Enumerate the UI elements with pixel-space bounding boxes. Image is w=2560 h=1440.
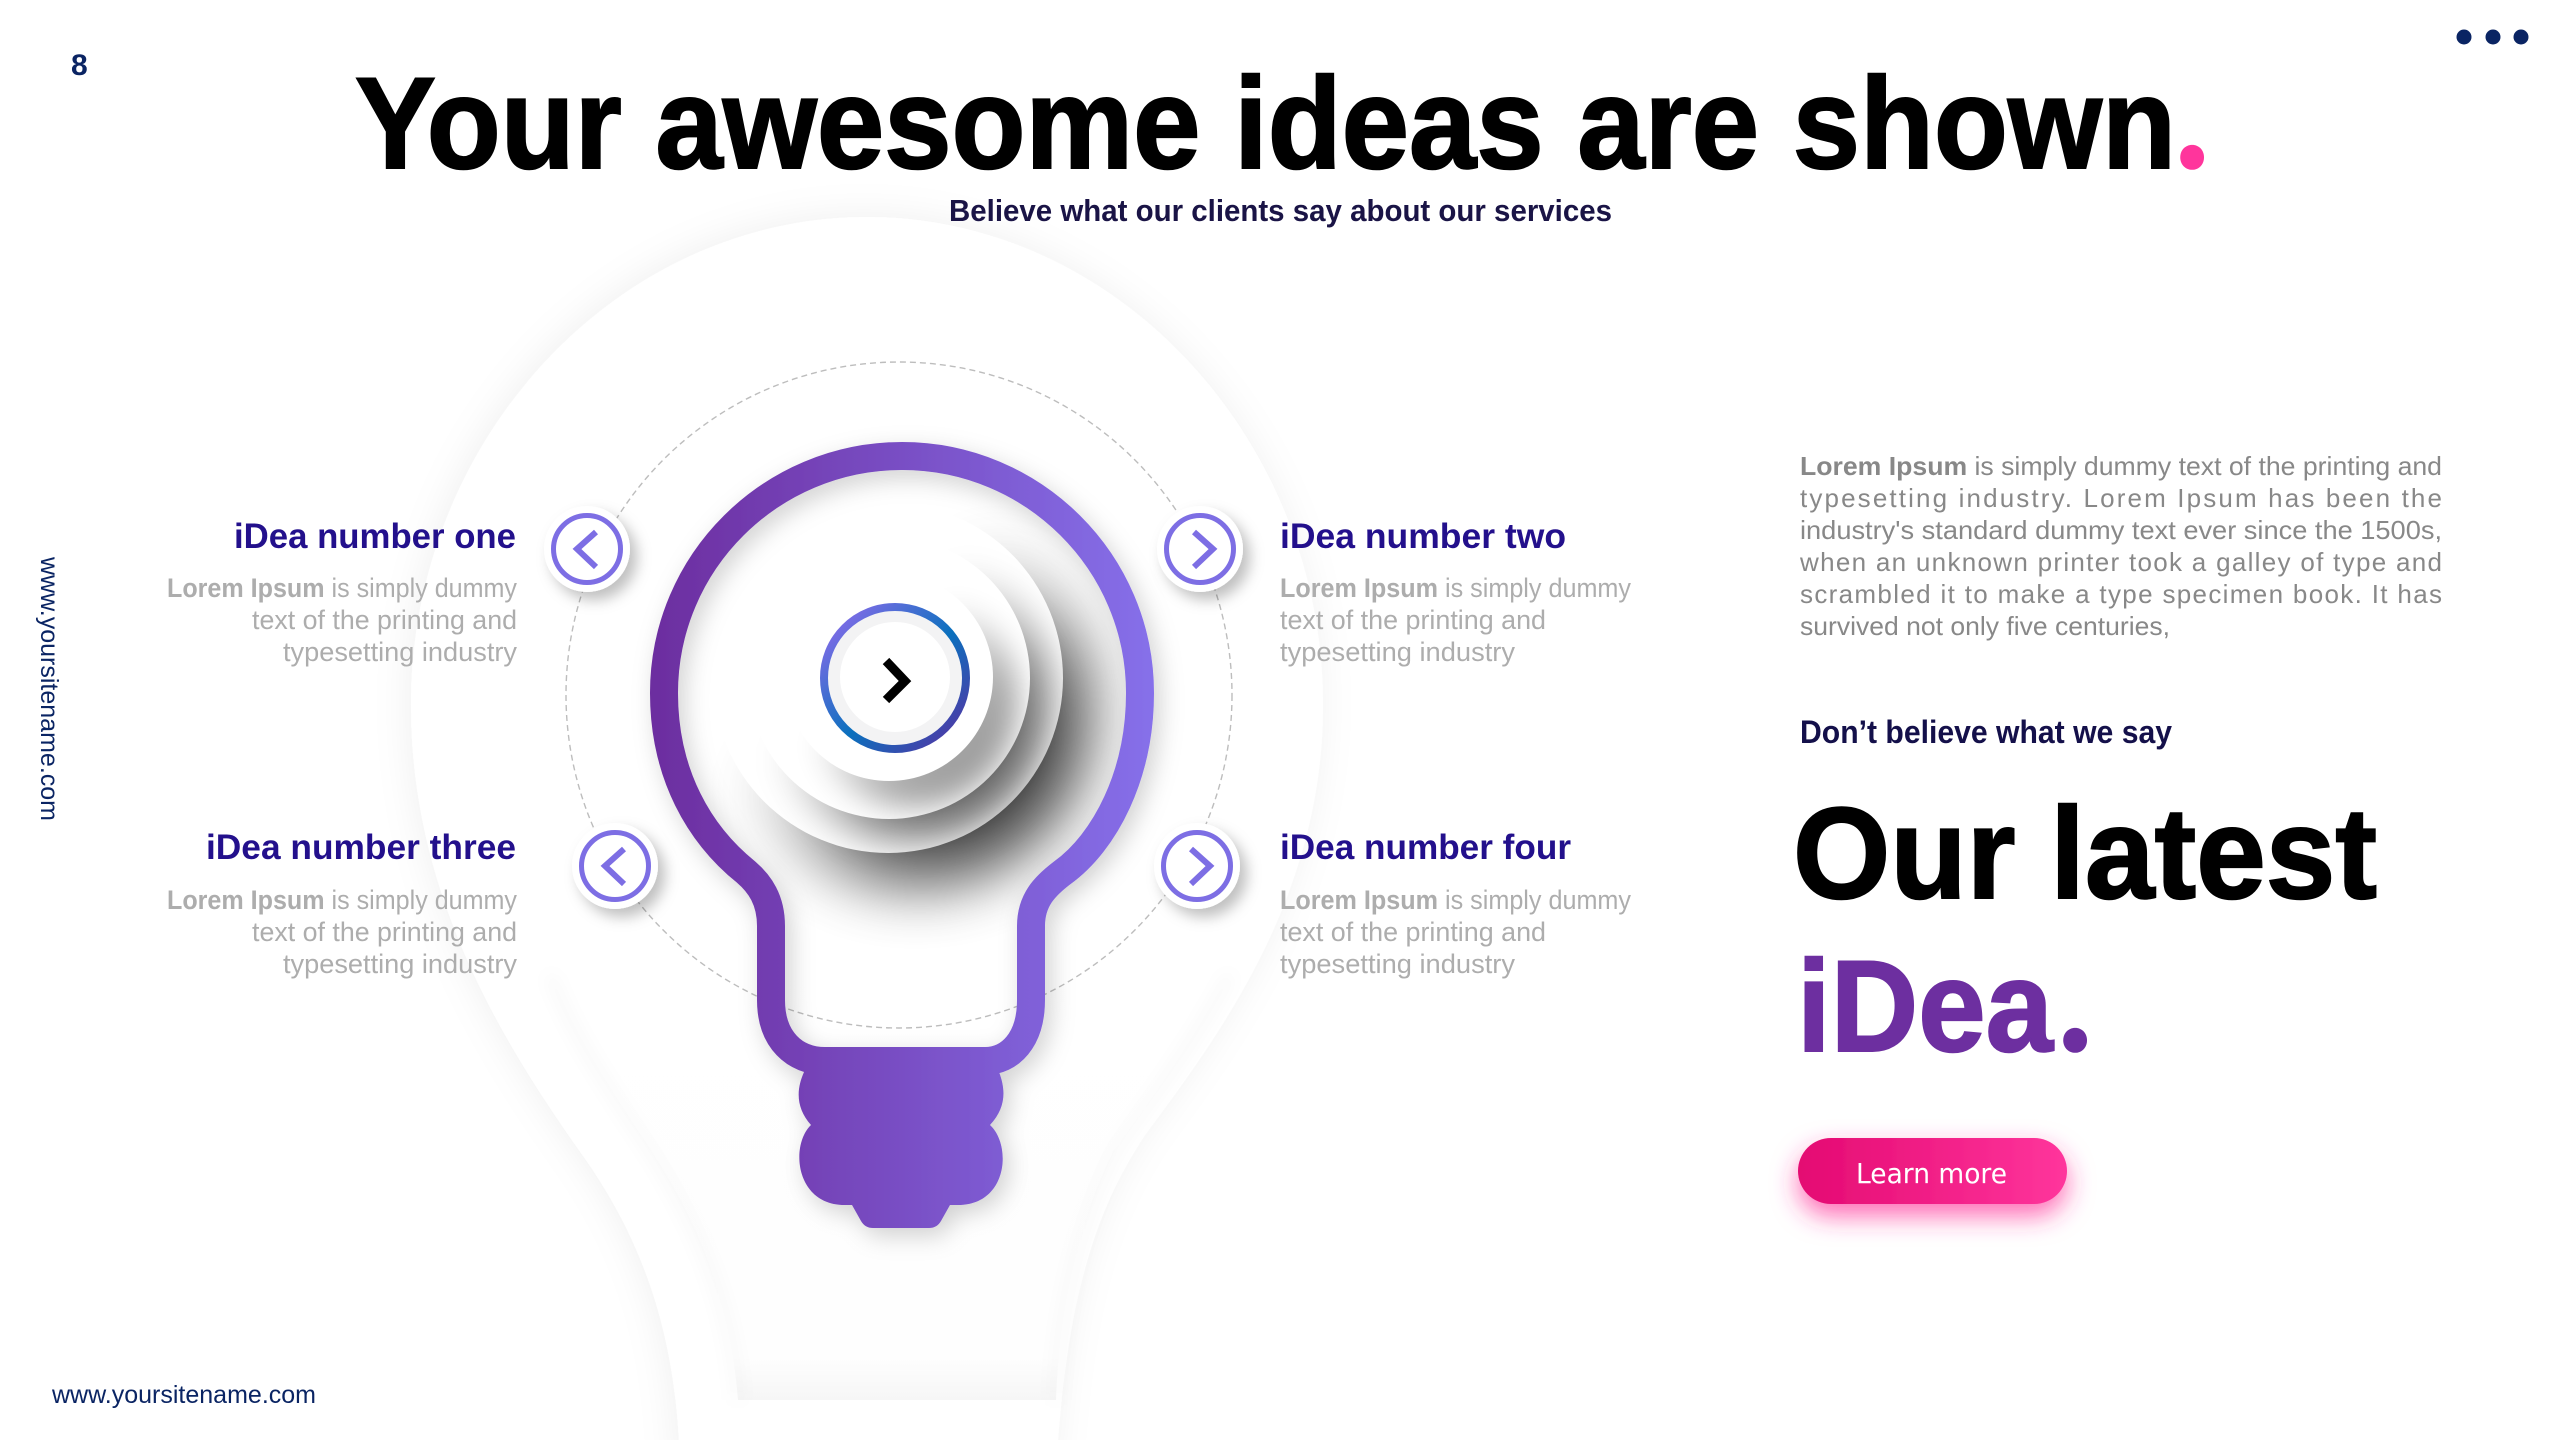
page number: 8 <box>71 49 88 82</box>
title: . <box>2171 18 2213 206</box>
idea three text <box>167 828 518 979</box>
dashed orbit circle <box>566 362 1232 1028</box>
idea three text: Lorem Ipsum is simply dummy <box>167 885 517 915</box>
headline: idea: iDea <box>1797 933 2055 1079</box>
centre button <box>824 607 966 749</box>
idea two text <box>1280 517 1631 667</box>
right paragraph: survived not only five centuries, <box>1800 611 2170 641</box>
headline: our latest: Our latest <box>1793 780 2377 926</box>
idea one text: typesetting industry <box>283 637 518 667</box>
idea four text <box>1280 828 1631 979</box>
right paragraph: Lorem Ipsum is simply dummy text of the printing and <box>1800 451 2442 481</box>
idea two text: Lorem Ipsum is simply dummy <box>1280 573 1631 603</box>
icon: idea two arrow <box>1157 506 1243 592</box>
subheading: Don’t believe what we say <box>1800 714 2172 750</box>
idea two text: typesetting industry <box>1280 637 1516 667</box>
learn more button: Learn more <box>1856 1157 2007 1190</box>
subtitle: Believe what our clients say about our services <box>949 193 1612 228</box>
title: Your awesome ideas are shown <box>355 50 2176 196</box>
background bulb silhouette <box>411 217 1323 1440</box>
idea three text: iDea number three <box>206 828 516 867</box>
idea one text: text of the printing and <box>252 605 517 635</box>
footer site name: www.yoursitename.com <box>51 1381 316 1409</box>
idea one text <box>167 517 518 667</box>
icon: centre chevron <box>886 661 905 700</box>
idea four text: typesetting industry <box>1280 949 1516 979</box>
right paragraph: scrambled it to make a type specimen book. It has <box>1800 579 2442 609</box>
idea four text: text of the printing and <box>1280 917 1546 947</box>
menu dots <box>2456 30 2528 44</box>
idea two text: text of the printing and <box>1280 605 1546 635</box>
bulb outline and base <box>664 456 1140 1228</box>
vertical site name: www.yoursitename.com <box>35 556 63 821</box>
idea one text: iDea number one <box>234 517 516 556</box>
icon: idea four arrow <box>1154 823 1240 909</box>
concentric shadow discs <box>713 503 1096 890</box>
learn more button <box>1798 1138 2067 1204</box>
right paragraph: industry's standard dummy text ever since the 1500s, <box>1800 515 2442 545</box>
right paragraph: when an unknown printer took a galley of type and <box>1799 547 2442 577</box>
headline: idea: . <box>2054 901 2096 1089</box>
idea three text: text of the printing and <box>252 917 517 947</box>
icon: idea three arrow <box>572 823 658 909</box>
idea four text: iDea number four <box>1280 828 1571 867</box>
right paragraph: typesetting industry. Lorem Ipsum has been the <box>1800 483 2442 513</box>
right paragraph <box>1799 451 2442 641</box>
idea four text: Lorem Ipsum is simply dummy <box>1280 885 1631 915</box>
idea one text: Lorem Ipsum is simply dummy <box>167 573 517 603</box>
idea two text: iDea number two <box>1280 517 1566 556</box>
icon: idea one arrow <box>544 506 630 592</box>
idea three text: typesetting industry <box>283 949 518 979</box>
